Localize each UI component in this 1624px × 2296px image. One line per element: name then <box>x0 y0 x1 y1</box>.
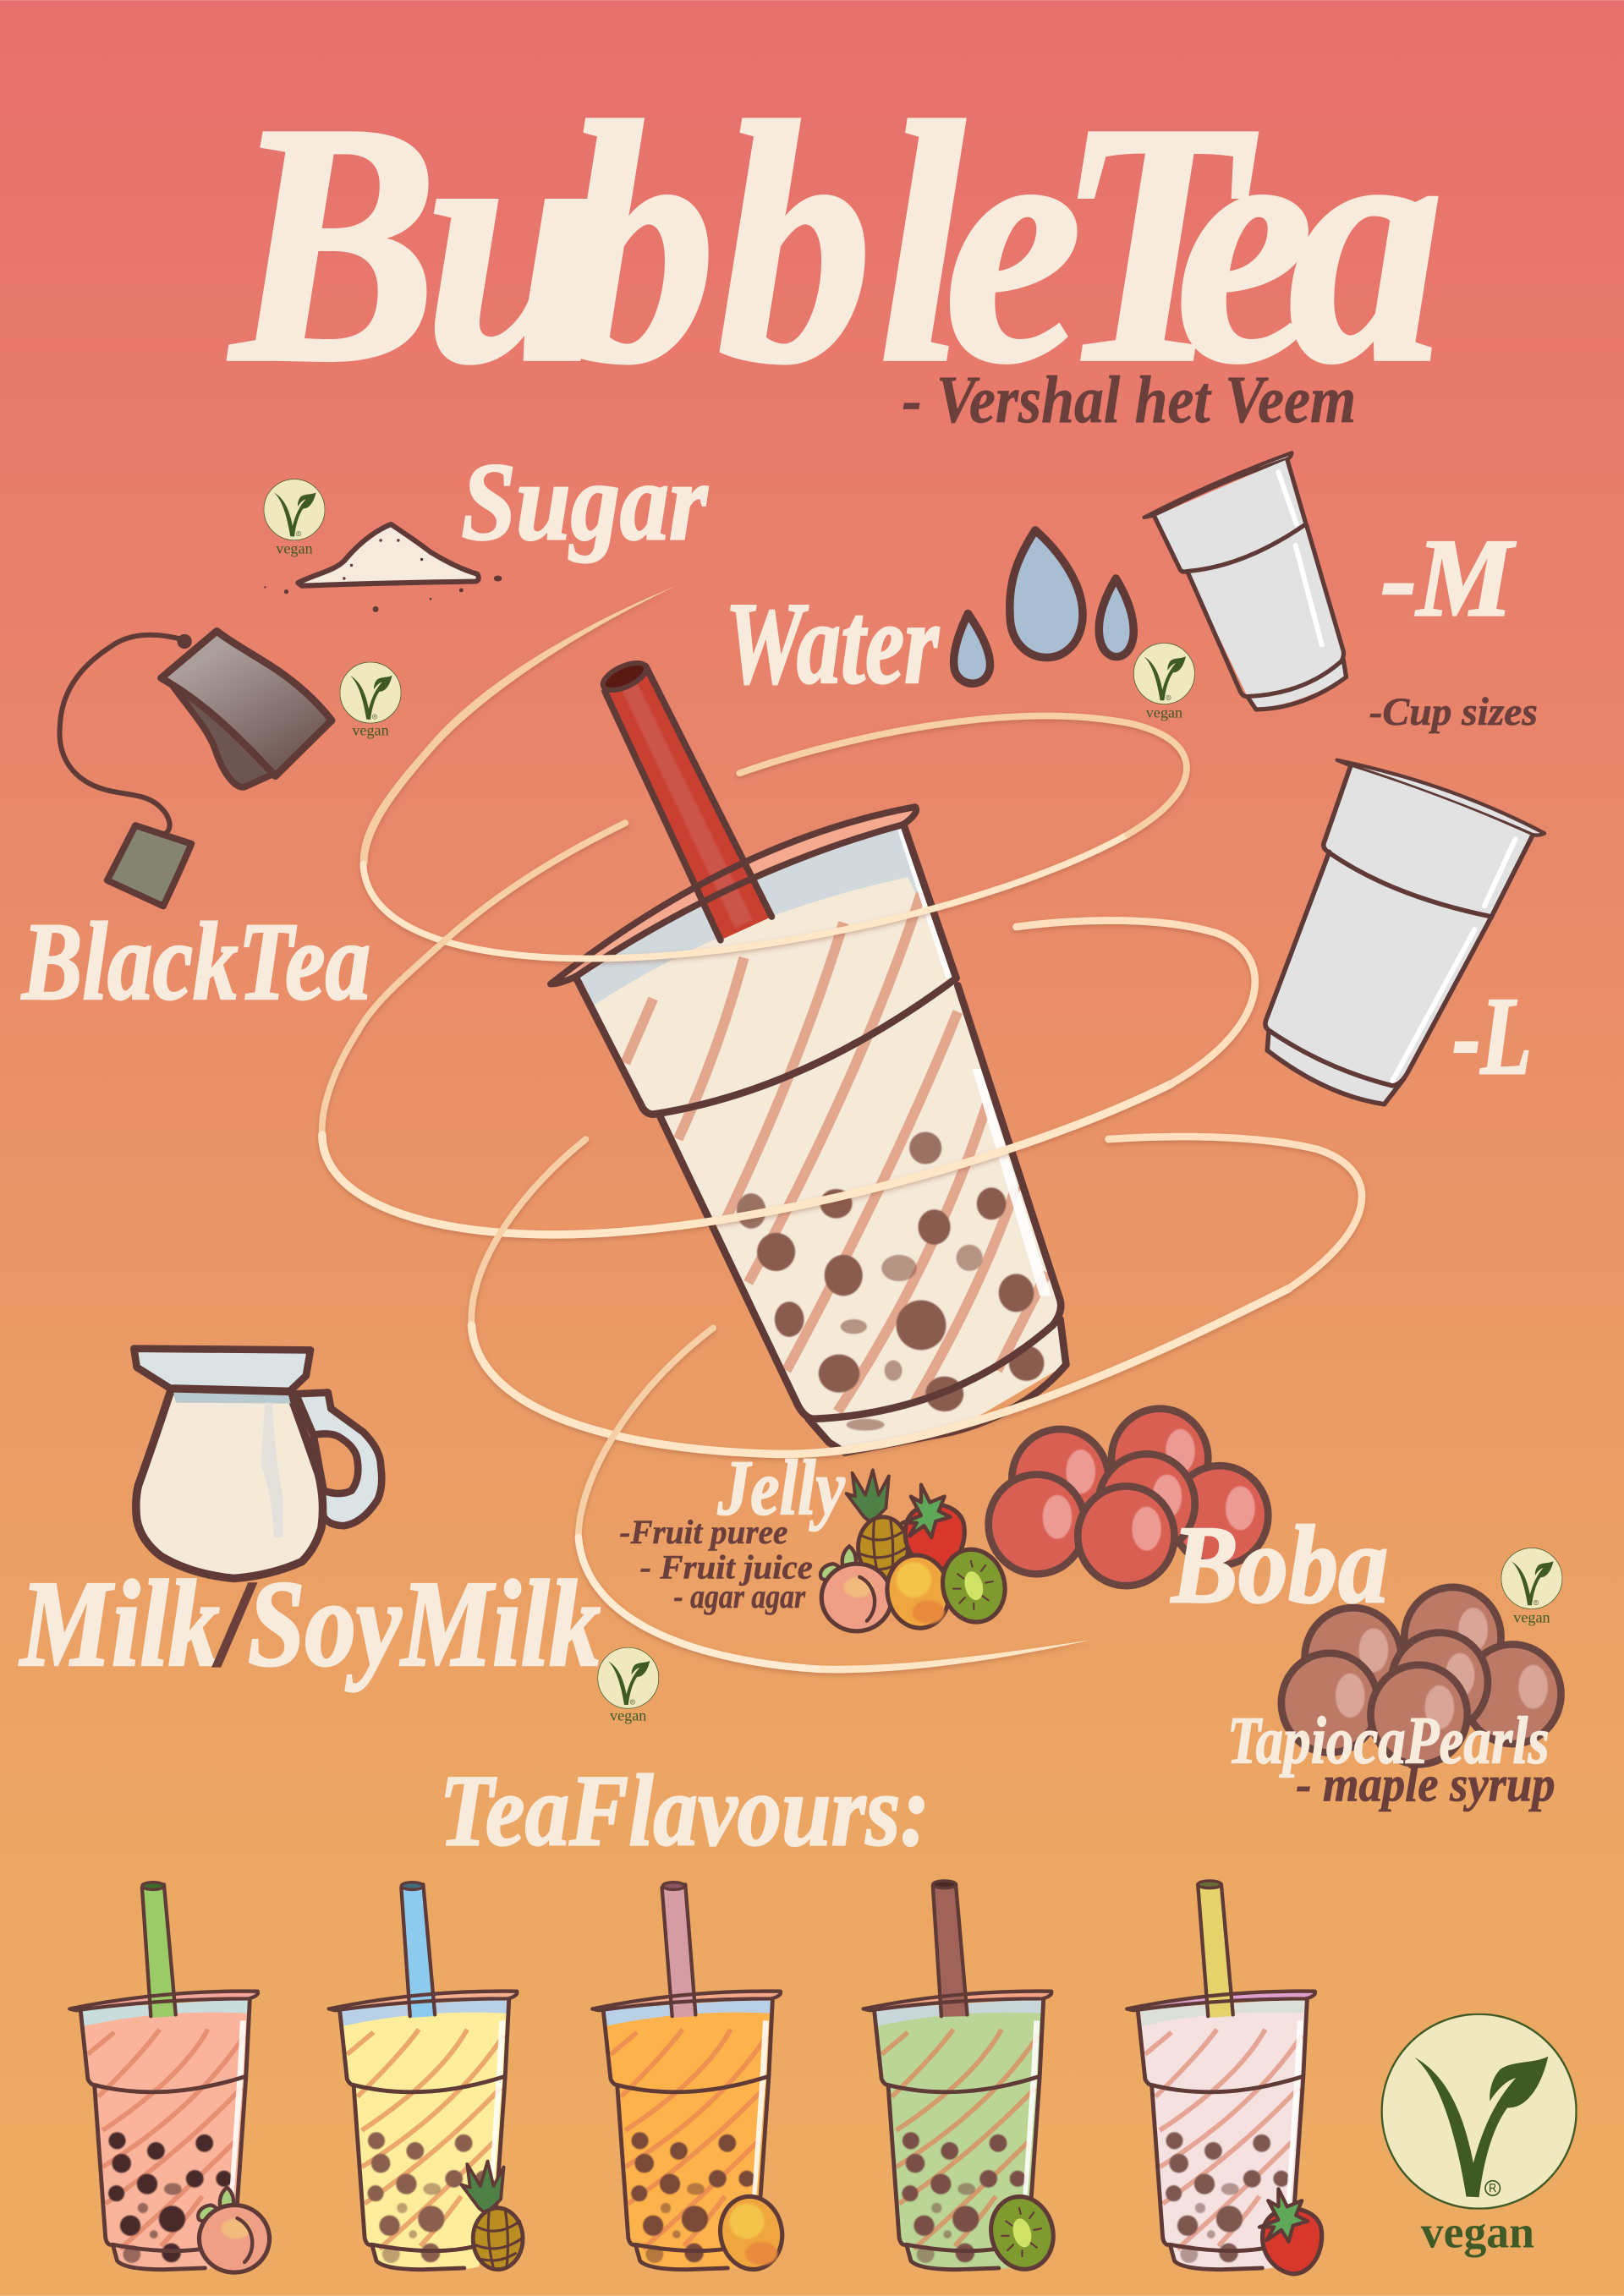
jelly group <box>619 1444 1012 1633</box>
jelly ingredients list: - agar agar <box>673 1578 806 1615</box>
flavour cup: mango <box>592 1882 787 2274</box>
title: BubbleTea <box>227 52 1444 434</box>
drink stripes <box>625 893 1047 1411</box>
flavour cup: pineapple <box>329 1882 523 2270</box>
label: water: Water <box>725 578 940 708</box>
flavour cup: kiwi <box>864 1881 1061 2276</box>
pitcher spout <box>134 1349 310 1391</box>
straw <box>599 657 771 940</box>
tapioca pearls <box>737 1132 1044 1431</box>
icon: vegan badge milk <box>598 1647 659 1723</box>
flavour cup: strawberry <box>1127 1881 1322 2274</box>
label: maple syrup: - maple syrup <box>1296 1757 1555 1812</box>
flavour cup: peach <box>69 1882 270 2272</box>
label: tapioca pearls: TapiocaPearls <box>1227 1704 1550 1778</box>
icon: vegan badge boba <box>1501 1548 1562 1625</box>
label: L: -L <box>1452 975 1532 1098</box>
icon: vegan badge water: vegan <box>1146 704 1182 721</box>
icon: vegan badge boba: vegan <box>1513 1608 1550 1625</box>
jelly ingredients list: - Fruit juice <box>640 1548 813 1586</box>
label: black tea: BlackTea <box>20 901 370 1023</box>
icon: tea bag <box>60 631 332 906</box>
icon: water drops <box>954 530 1133 683</box>
jelly ingredients list: -Fruit puree <box>619 1514 787 1551</box>
label: M: -M <box>1381 517 1516 639</box>
icon: sugar pile <box>264 524 502 612</box>
label: boba: Boba <box>1170 1504 1388 1626</box>
tapioca pearls cluster <box>1281 1587 1561 1764</box>
milk pitcher <box>134 1349 381 1578</box>
pitcher highlight <box>261 1403 283 1537</box>
pitcher air band <box>173 1393 291 1404</box>
icon: large vegan logo: vegan <box>1421 2207 1534 2258</box>
icon: vegan badge tea: vegan <box>352 721 389 738</box>
label: jelly: Jelly <box>717 1444 845 1532</box>
icon: large vegan logo <box>1382 2014 1577 2258</box>
subtitle: - Vershal het Veem <box>902 363 1356 437</box>
icon: vegan badge sugar: vegan <box>276 540 313 557</box>
cup contents <box>575 825 1060 1419</box>
icon: vegan badge water <box>1133 644 1194 721</box>
icon: vegan badge milk: vegan <box>610 1707 646 1723</box>
cup outline <box>551 807 1066 1453</box>
cup highlights <box>897 827 1051 1296</box>
label: milk / soy milk: Milk/SoyMilk <box>19 1556 601 1692</box>
icon: vegan badge sugar <box>264 479 325 557</box>
heading: tea flavours: TeaFlavours: <box>439 1755 930 1868</box>
large cup <box>1265 760 1544 1104</box>
red boba cluster <box>989 1409 1268 1586</box>
icon: vegan badge tea <box>340 662 401 738</box>
pitcher handle <box>296 1393 381 1526</box>
swirl ribbons <box>322 586 1362 1673</box>
water group <box>725 530 1194 721</box>
icon: fruit cluster <box>820 1470 1012 1633</box>
cup rim fill <box>551 807 916 984</box>
pitcher body <box>136 1391 323 1578</box>
black tea group <box>20 631 401 1023</box>
main bubble tea cup <box>551 657 1066 1453</box>
medium cup <box>1144 452 1347 710</box>
jelly ingredients list <box>619 1514 813 1615</box>
label: sugar: Sugar <box>461 441 709 563</box>
sugar group <box>264 441 709 612</box>
label: cup sizes: -Cup sizes <box>1369 690 1538 734</box>
